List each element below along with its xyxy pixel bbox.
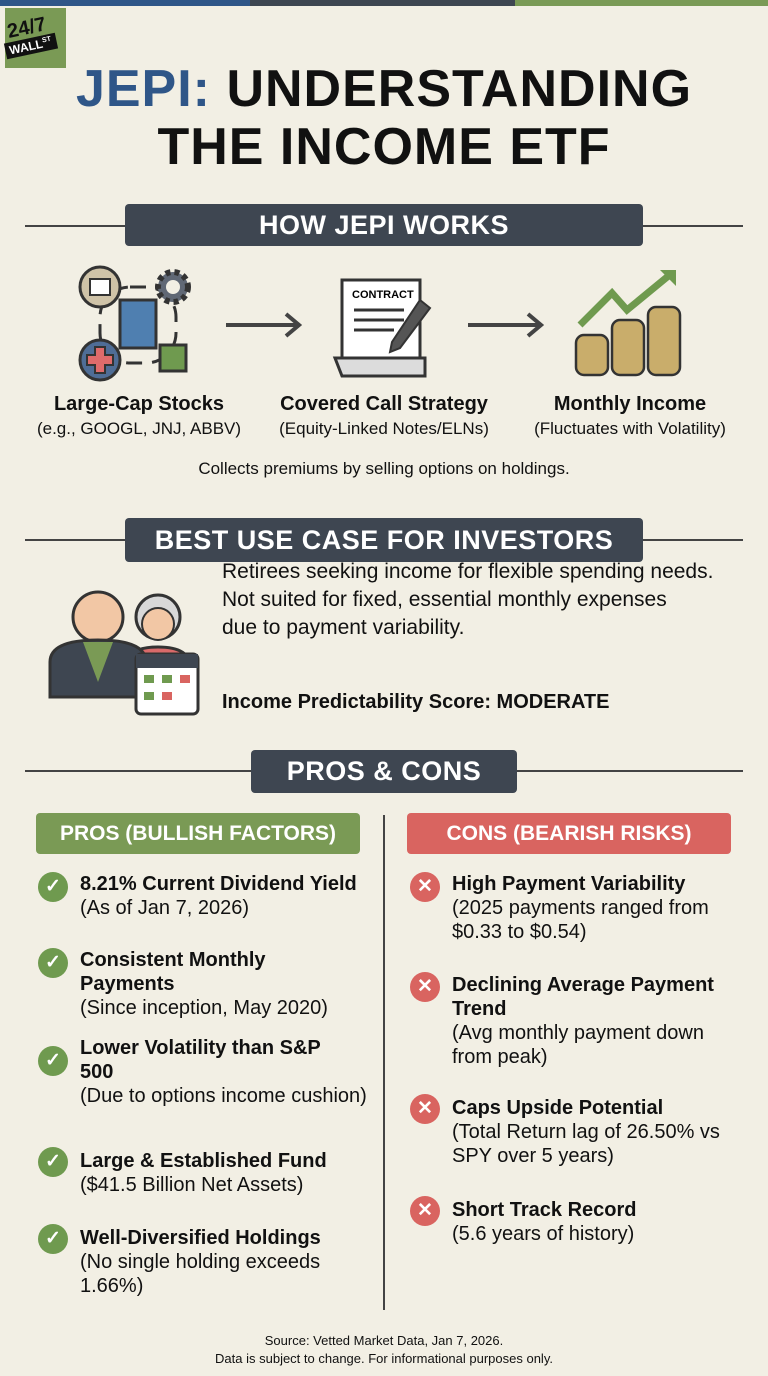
top color bar <box>0 0 768 6</box>
cons list: (5.6 years of history) <box>452 1223 634 1245</box>
footer source: Source: Vetted Market Data, Jan 7, 2026. <box>265 1333 503 1348</box>
cons list: (Total Return lag of 26.50% vs <box>452 1121 720 1143</box>
banner: how jepi works: HOW JEPI WORKS <box>259 210 509 240</box>
footer source <box>215 1333 553 1366</box>
label: monthly income: (Fluctuates with Volatility) <box>534 419 726 438</box>
banner: best use case: BEST USE CASE FOR INVESTORS <box>155 525 613 555</box>
logo: WALLST <box>8 36 52 57</box>
icon: contract <box>332 278 432 378</box>
banner: pros & cons <box>251 750 517 793</box>
pros list: ✓ <box>45 1050 61 1071</box>
footer source: Data is subject to change. For informational purposes only. <box>215 1351 553 1366</box>
pros list: Large & Established Fund <box>80 1150 327 1172</box>
cons list: ✕ <box>417 976 433 997</box>
cons header: CONS (BEARISH RISKS) <box>446 822 692 845</box>
banner: pros & cons: PROS & CONS <box>287 756 481 786</box>
use case text: Not suited for fixed, essential monthly expenses <box>222 588 667 611</box>
pros list: (Due to options income cushion) <box>80 1085 367 1107</box>
pros header <box>36 813 360 854</box>
cons list: SPY over 5 years) <box>452 1145 614 1167</box>
cons list: Trend <box>452 998 506 1020</box>
cons list <box>410 872 720 1245</box>
caption: Collects premiums by selling options on holdings. <box>198 459 570 478</box>
pros list <box>38 872 367 1297</box>
pros list: ✓ <box>45 876 61 897</box>
pro 3 <box>38 1037 367 1107</box>
pros list: Lower Volatility than S&P <box>80 1037 321 1059</box>
title: JEPI: UNDERSTANDING <box>76 60 692 118</box>
title <box>76 60 692 176</box>
icon: retirees with calendar <box>48 590 200 716</box>
pros list: (No single holding exceeds <box>80 1251 320 1273</box>
pros list: Consistent Monthly <box>80 949 266 971</box>
con 2 <box>410 972 714 1068</box>
pro 5 <box>38 1224 321 1297</box>
use case text: Retirees seeking income for flexible spending needs. <box>222 560 713 583</box>
icon: large-cap stocks <box>78 266 191 382</box>
label: covered call <box>279 393 489 438</box>
icon: coins with growth <box>574 270 682 376</box>
label: monthly income: Monthly Income <box>554 393 706 415</box>
pros list: ✓ <box>45 1151 61 1172</box>
logo: 24/7 <box>5 13 48 43</box>
pro 1 <box>38 872 357 919</box>
cons list: from peak) <box>452 1046 548 1068</box>
arrow 1 <box>226 312 302 338</box>
con 1 <box>410 872 709 943</box>
logo <box>5 8 66 68</box>
label: large-cap: (e.g., GOOGL, JNJ, ABBV) <box>37 419 241 438</box>
cons list: $0.33 to $0.54) <box>452 921 587 943</box>
pros list: ✓ <box>45 952 61 973</box>
cons list: High Payment Variability <box>452 873 685 895</box>
banner: best use case <box>125 518 643 562</box>
pro 4 <box>38 1147 327 1196</box>
pros list: (Since inception, May 2020) <box>80 997 328 1019</box>
use case text <box>222 560 713 639</box>
icon: contract: CONTRACT <box>352 289 414 301</box>
label: monthly income <box>534 393 726 438</box>
cons list: ✕ <box>417 1098 433 1119</box>
pros list: 500 <box>80 1061 113 1083</box>
pros list: 8.21% Current Dividend Yield <box>80 873 357 895</box>
pros list: ($41.5 Billion Net Assets) <box>80 1174 303 1196</box>
predictability score: Income Predictability Score: MODERATE <box>222 691 610 713</box>
use case text: due to payment variability. <box>222 616 464 639</box>
cons list: Short Track Record <box>452 1199 637 1221</box>
label: large-cap <box>37 393 241 438</box>
pros list: ✓ <box>45 1228 61 1249</box>
cons header <box>407 813 731 854</box>
con 4 <box>410 1196 637 1245</box>
title: THE INCOME ETF <box>157 118 611 176</box>
cons list: (2025 payments ranged from <box>452 897 709 919</box>
pros list: Payments <box>80 973 174 995</box>
label: large-cap: Large-Cap Stocks <box>54 393 224 415</box>
pros list: (As of Jan 7, 2026) <box>80 897 249 919</box>
con 3 <box>410 1094 720 1167</box>
arrow 2 <box>468 312 544 338</box>
cons list: ✕ <box>417 876 433 897</box>
cons list: Caps Upside Potential <box>452 1097 663 1119</box>
banner: how jepi works <box>125 204 643 246</box>
cons list: (Avg monthly payment down <box>452 1022 704 1044</box>
label: covered call: Covered Call Strategy <box>280 393 488 415</box>
pros list: 1.66%) <box>80 1275 143 1297</box>
pros list: Well-Diversified Holdings <box>80 1227 321 1249</box>
cons list: ✕ <box>417 1200 433 1221</box>
cons list: Declining Average Payment <box>452 974 714 996</box>
pro 2 <box>38 948 328 1019</box>
pros header: PROS (BULLISH FACTORS) <box>60 822 336 845</box>
label: covered call: (Equity-Linked Notes/ELNs) <box>279 419 489 438</box>
